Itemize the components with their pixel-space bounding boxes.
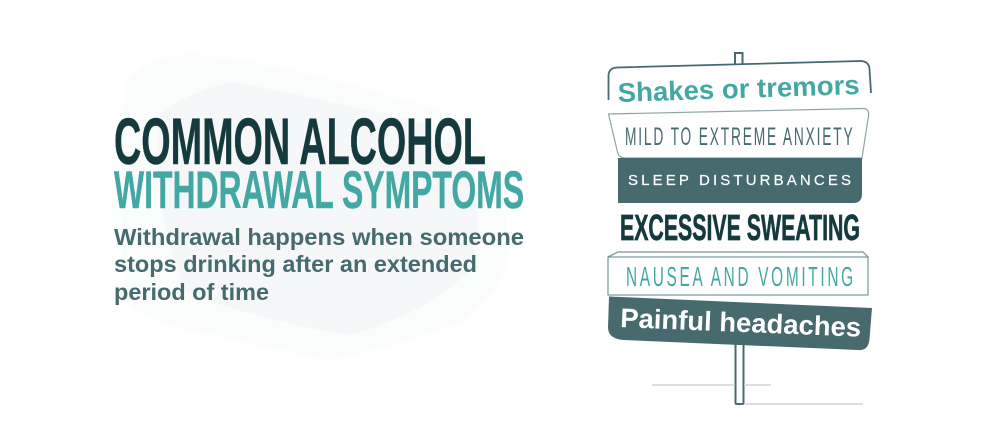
title line 1: COMMON ALCOHOL	[114, 104, 486, 178]
intro paragraph	[114, 224, 524, 305]
sign: sleep disturbances	[618, 158, 862, 203]
intro paragraph: stops drinking after an extended	[114, 251, 477, 277]
sign: painful headaches: Painful headaches	[620, 303, 862, 343]
sign: sleep disturbances: SLEEP DISTURBANCES	[628, 172, 851, 189]
sign: painful headaches	[608, 296, 872, 350]
post top	[735, 53, 742, 65]
post bottom	[736, 340, 744, 404]
ground lines	[652, 385, 863, 404]
heading block	[114, 104, 524, 220]
background blob	[122, 54, 508, 361]
intro paragraph: period of time	[114, 279, 269, 305]
sign: mild to extreme anxiety	[608, 108, 869, 158]
sign: nausea and vomiting	[608, 252, 868, 295]
intro paragraph: Withdrawal happens when someone	[114, 224, 524, 250]
sign: nausea and vomiting: NAUSEA AND VOMITING	[626, 261, 853, 292]
sign: shakes or tremors: Shakes or tremors	[617, 70, 860, 108]
sign: mild to extreme anxiety: MILD TO EXTREME ANXIETY	[625, 124, 853, 151]
signpost	[608, 53, 872, 404]
title line 2: WITHDRAWAL SYMPTOMS	[114, 161, 524, 220]
